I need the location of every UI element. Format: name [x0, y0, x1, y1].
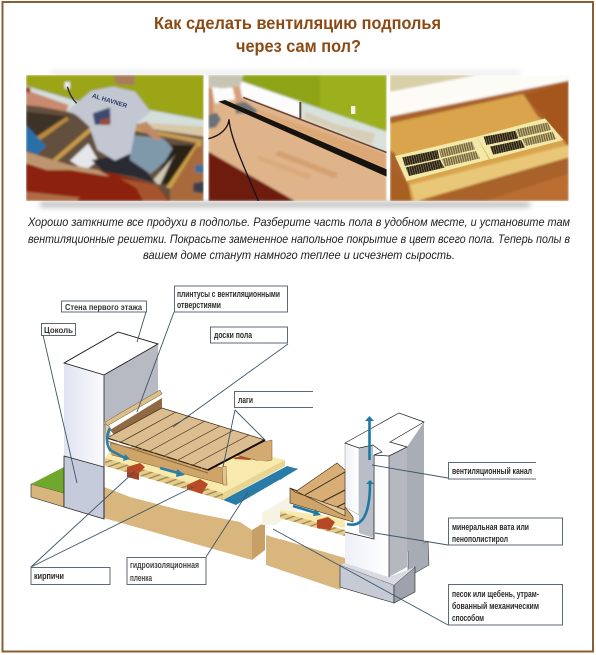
callout: sand or gravel — [448, 584, 562, 625]
intro text: Хорошо заткните все продухи в подполье. Разберите часть пола в удобном месте, и установите там — [27, 216, 570, 229]
bricks — [127, 455, 252, 494]
callout: floor boards: доски пола — [214, 330, 252, 340]
intro text — [27, 216, 570, 262]
right section floor — [280, 463, 353, 536]
title — [154, 13, 441, 56]
title: через сам пол? — [236, 36, 361, 56]
callout: skirting with vent holes: плинтусы с вентиляционными — [177, 289, 280, 299]
left wall — [64, 332, 158, 519]
shirt print: AL HAVNER — [91, 93, 128, 110]
callout: plinth: Цоколь — [44, 325, 73, 335]
callout: sand or gravel: бованный механическим — [452, 601, 539, 611]
callout: waterproofing film: пленка — [130, 573, 152, 583]
ground: soil and grass — [31, 467, 350, 590]
title: Как сделать вентиляцию подполья — [154, 13, 441, 33]
callout: vent channel: вентиляционный канал — [452, 466, 532, 476]
callout: mineral wool: минеральная вата или — [452, 522, 529, 532]
callout: bricks — [31, 568, 110, 584]
callout: waterproofing film: гидроизоляционная — [130, 560, 199, 570]
callout: bricks: кирпичи — [34, 571, 64, 581]
floor frame and beams — [110, 440, 275, 485]
callout: sand or gravel: способом — [452, 613, 484, 623]
callout: joists: лаги — [238, 395, 253, 405]
callout: mineral wool — [448, 518, 562, 545]
callout: sand or gravel: песок или щебень, утрам- — [452, 589, 539, 599]
airflow arrows: left section — [107, 428, 185, 477]
callout: joists — [234, 392, 313, 408]
floor boards — [107, 408, 265, 473]
callout: waterproofing film — [127, 558, 206, 584]
callout: mineral wool: пенополистирол — [452, 534, 508, 544]
callout: skirting with vent holes — [174, 286, 288, 312]
callout: vent channel — [448, 462, 536, 479]
cable — [208, 119, 258, 201]
photo strip shadow — [40, 71, 530, 207]
airflow arrows: vent channel — [293, 416, 374, 525]
photo: floorboards with slot along baseboard — [208, 75, 387, 201]
right wall section — [280, 413, 429, 603]
callout: skirting with vent holes: отверстиями — [177, 300, 221, 310]
intro text: вашем доме станут намного теплее и исчезнет сырость. — [143, 249, 455, 262]
insulation and film layers — [105, 437, 298, 505]
diagram: under-floor ventilation section — [31, 286, 562, 625]
leader lines — [31, 312, 448, 625]
photo: workers at floor opening — [26, 75, 204, 201]
skirting with vents — [105, 390, 162, 440]
callout: wall of first floor: Стена первого этажа — [65, 302, 142, 312]
callout: floor boards — [210, 327, 288, 343]
photo: installed vent grilles — [390, 75, 569, 201]
